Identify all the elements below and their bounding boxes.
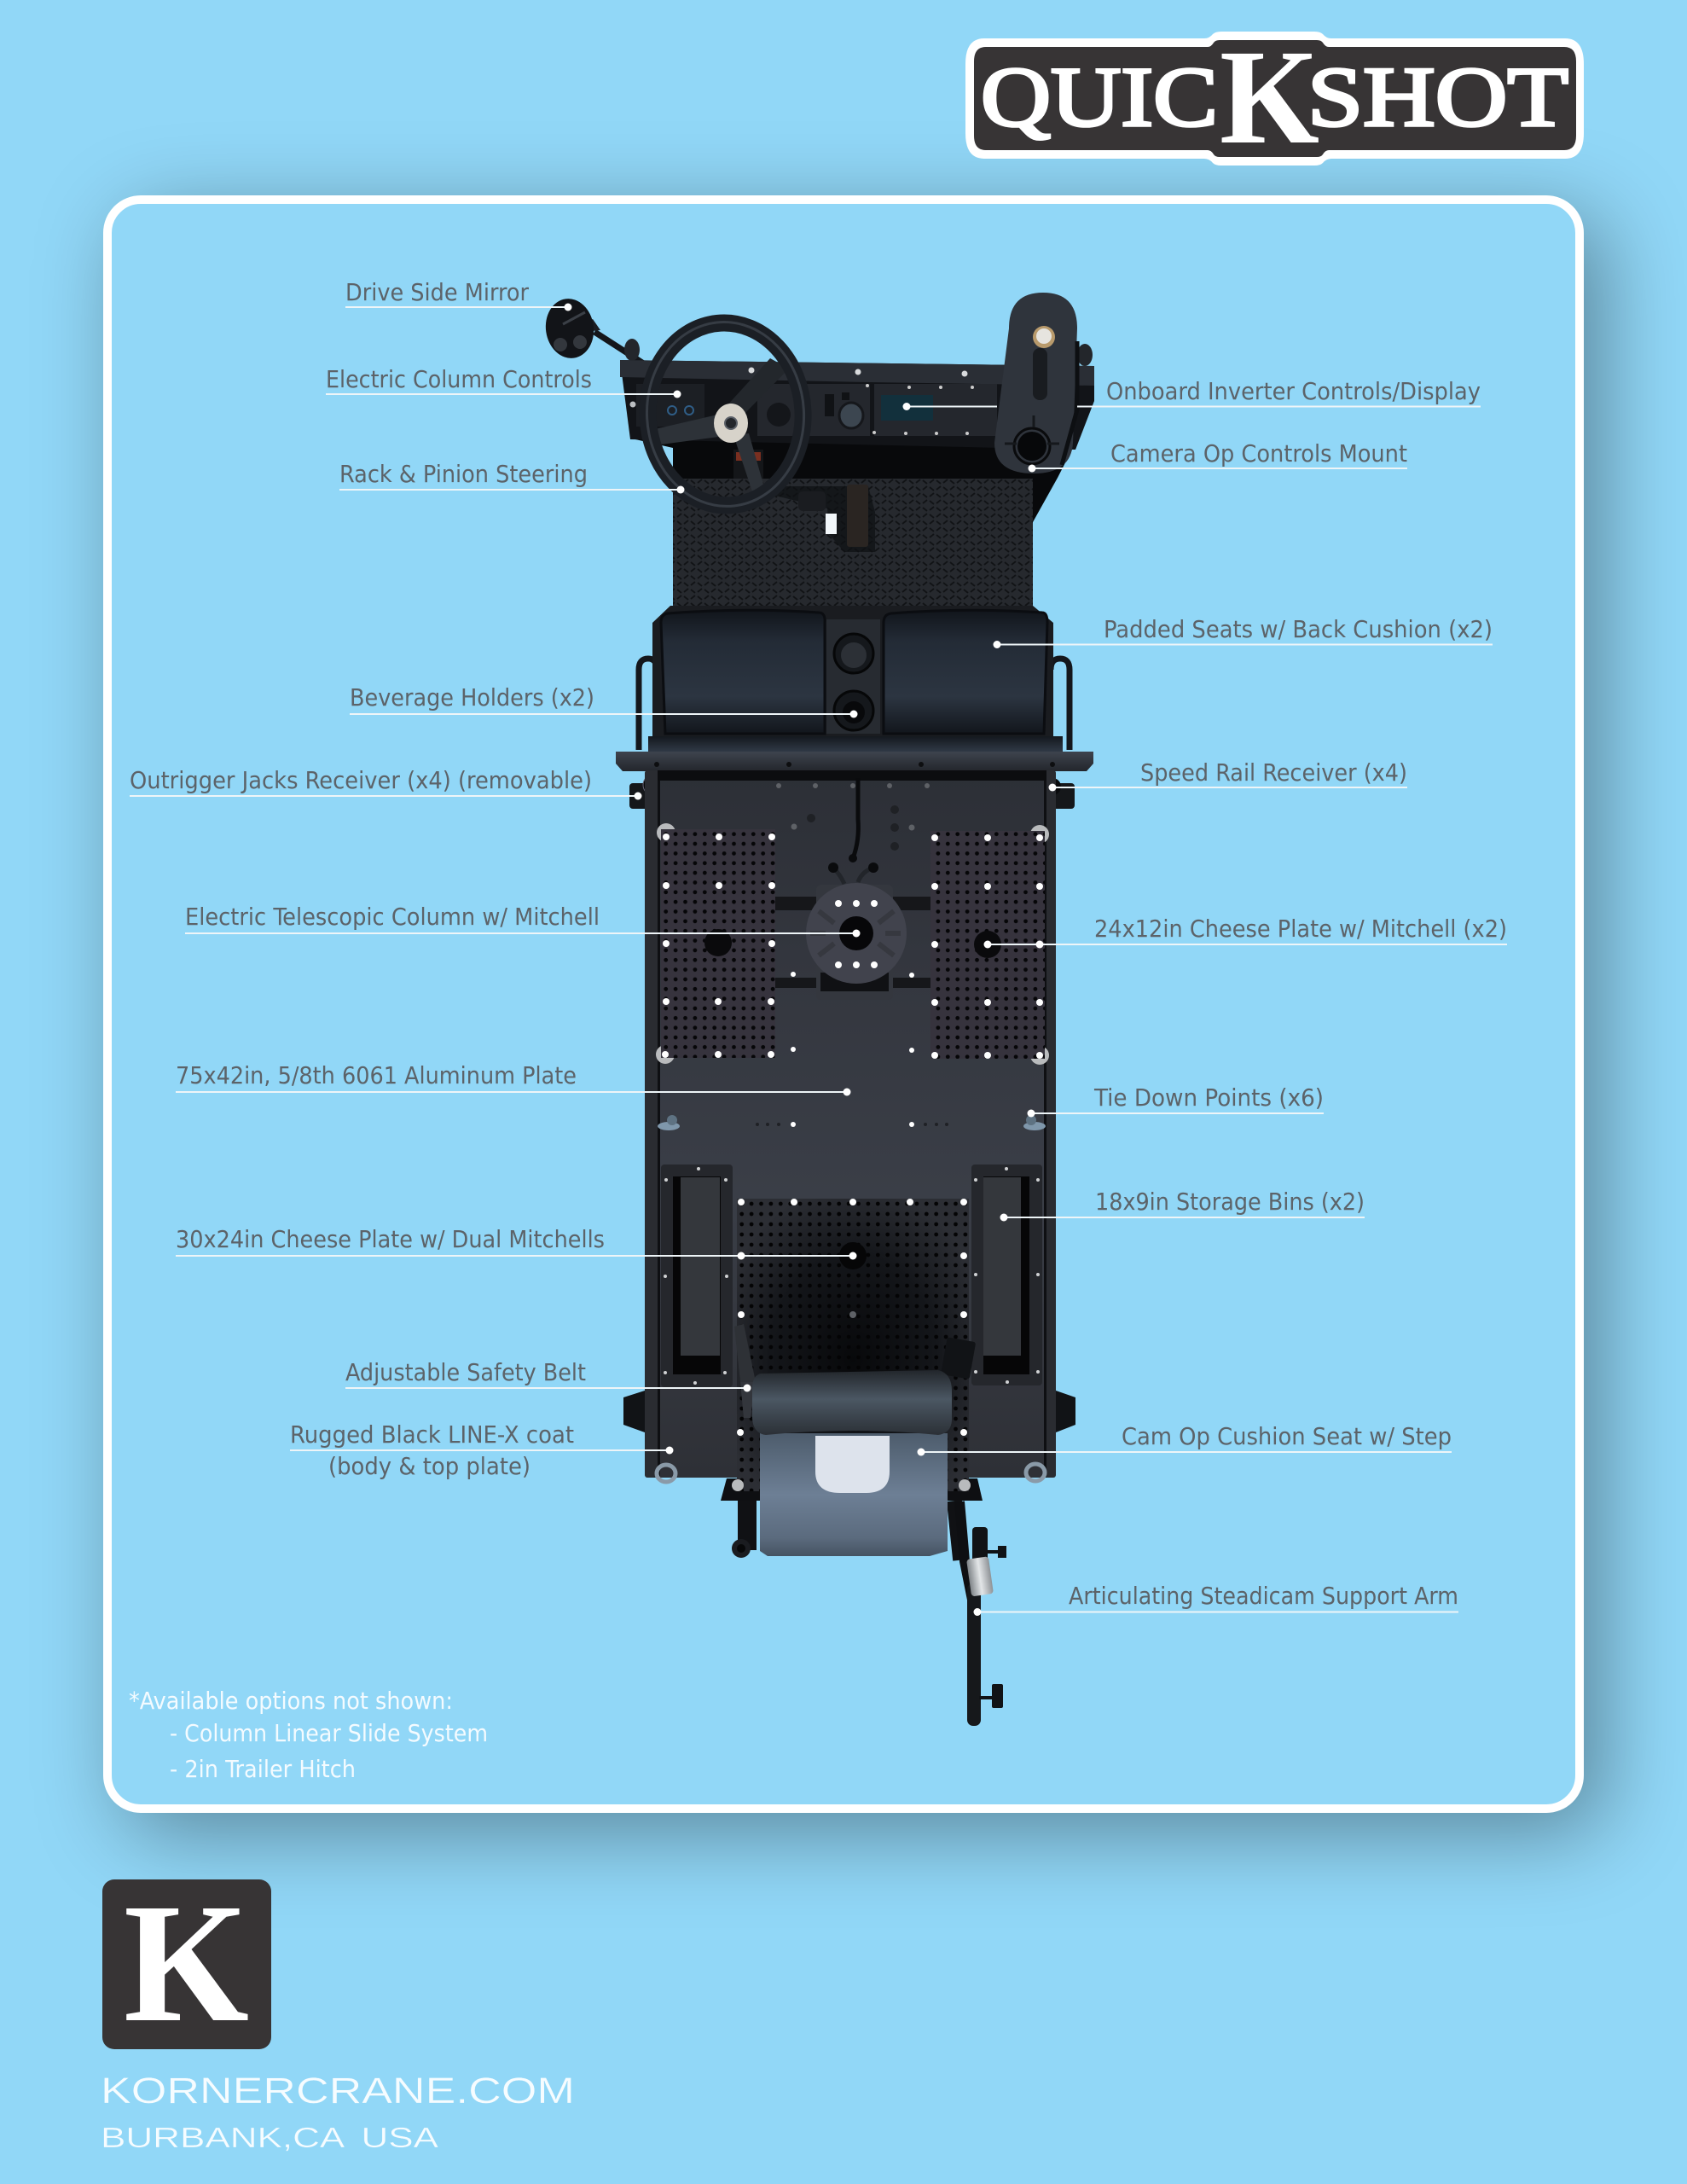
seat frame bbox=[639, 606, 1070, 750]
storage bin right bbox=[971, 1165, 1042, 1385]
plate white screws bbox=[791, 972, 914, 1127]
logo: QuickShot: SHOT bbox=[1307, 49, 1568, 144]
electric telescopic column bbox=[775, 854, 930, 1000]
label: Outrigger Jacks Receiver: Outrigger Jacks Receiver (x4) (removable) bbox=[130, 767, 592, 794]
label: Padded Seats: Padded Seats w/ Back Cushion (x2) bbox=[1104, 616, 1493, 643]
vehicle: QuickShot camera car top view bbox=[542, 293, 1094, 1726]
padded seats bbox=[661, 610, 1047, 734]
label: Storage Bins: 18x9in Storage Bins (x2) bbox=[1095, 1188, 1365, 1216]
label: Camera Op Controls Mount bbox=[1029, 440, 1407, 473]
footer: website: KORNERCRANE.COM bbox=[101, 2071, 575, 2111]
label: Drive Side Mirror: Drive Side Mirror bbox=[345, 279, 530, 306]
left cheese plate bbox=[656, 823, 775, 1064]
label: Aluminum Plate bbox=[176, 1062, 851, 1095]
label: Speed Rail Receiver bbox=[1049, 759, 1407, 792]
plate fixtures bbox=[776, 783, 930, 831]
label: Onboard Inverter bbox=[902, 378, 1481, 410]
label: Rack & Pinion Steering bbox=[339, 461, 684, 493]
label: Electric Telescopic Column: Electric Telescopic Column w/ Mitchell bbox=[185, 903, 600, 931]
note: available options: *Available options not shown: bbox=[129, 1687, 453, 1715]
cable run bbox=[853, 778, 858, 858]
footer: location: BURBANK,CA USA bbox=[101, 2122, 438, 2153]
label: 24x12in Cheese Plate bbox=[984, 915, 1507, 949]
label: Padded Seats bbox=[993, 616, 1493, 648]
dashboard bbox=[620, 360, 1094, 522]
label: Tie Down Points bbox=[1027, 1084, 1324, 1118]
floor: diamond plate and pedals bbox=[673, 479, 1033, 607]
label: Aluminum Plate: 75x42in, 5/8th 6061 Aluminum Plate bbox=[176, 1062, 577, 1089]
label: Steadicam Support Arm: Articulating Steadicam Support Arm bbox=[1069, 1583, 1458, 1610]
note: available options bbox=[129, 1687, 488, 1783]
label: Rugged Black LINE-X coat: Rugged Black LINE-X coat bbox=[290, 1421, 574, 1449]
icon: drive side mirror bbox=[542, 295, 645, 364]
center cheese plate bbox=[732, 1199, 971, 1491]
label: Rugged Black LINE-X coat bbox=[290, 1421, 674, 1480]
label: Electric Column Controls: Electric Column Controls bbox=[326, 366, 592, 393]
panel: main card bbox=[103, 195, 1584, 1813]
label: Adjustable Safety Belt: Adjustable Safety Belt bbox=[345, 1359, 586, 1386]
label: Onboard Inverter: Onboard Inverter Controls/Display bbox=[1106, 378, 1481, 405]
storage bin left bbox=[661, 1165, 733, 1387]
cam op cushion seat bbox=[752, 1370, 952, 1556]
label: Electric Telescopic Column bbox=[185, 903, 860, 937]
note: available options: - Column Linear Slide System bbox=[170, 1720, 488, 1747]
logo: QuickShot: QUIC bbox=[981, 49, 1218, 144]
bench edge and top bar bbox=[616, 736, 1093, 771]
rear bar and posts bbox=[721, 1478, 983, 1561]
tie down points bbox=[657, 1115, 1046, 1482]
label: Speed Rail Receiver: Speed Rail Receiver (x4) bbox=[1140, 759, 1407, 787]
label: Cam Op Cushion Seat bbox=[918, 1423, 1452, 1455]
label: 30x24in Cheese Plate: 30x24in Cheese Plate w/ Dual Mitchells bbox=[176, 1226, 605, 1253]
label: Camera Op Controls Mount: Camera Op Controls Mount bbox=[1110, 440, 1407, 468]
label: 24x12in Cheese Plate: 24x12in Cheese Plate w/ Mitchell (x2) bbox=[1094, 915, 1507, 943]
label: Storage Bins bbox=[1000, 1188, 1365, 1222]
steering wheel bbox=[642, 318, 809, 510]
articulating steadicam support arm bbox=[959, 1502, 1006, 1726]
label: 30x24in Cheese Plate bbox=[176, 1226, 856, 1259]
top plate body bbox=[645, 770, 1056, 1478]
label: Tie Down Points: Tie Down Points (x6) bbox=[1093, 1084, 1324, 1112]
label: Drive Side Mirror bbox=[345, 279, 571, 311]
label: Cam Op Cushion Seat: Cam Op Cushion Seat w/ Step bbox=[1122, 1423, 1452, 1450]
side outrigger receivers bbox=[623, 775, 1075, 1432]
label: Beverage Holders: Beverage Holders (x2) bbox=[350, 684, 594, 712]
safety belts bbox=[734, 1324, 976, 1418]
label: Steadicam Support Arm bbox=[974, 1583, 1458, 1616]
label: Adjustable Safety Belt bbox=[345, 1359, 751, 1392]
label: Electric Column Controls bbox=[326, 366, 681, 398]
label: Rugged Black LINE-X coat: (body & top plate) bbox=[328, 1453, 530, 1480]
label: Beverage Holders bbox=[350, 684, 858, 718]
logo: K badge: K bbox=[124, 1869, 249, 2058]
note: available options: - 2in Trailer Hitch bbox=[170, 1756, 356, 1783]
camera op controls mount bbox=[994, 293, 1093, 473]
logo: QuickShot bbox=[965, 22, 1584, 172]
logo: QuickShot: K bbox=[1220, 22, 1319, 172]
label: Rack & Pinion Steering: Rack & Pinion Steering bbox=[339, 461, 588, 488]
beverage holders bbox=[826, 619, 880, 734]
right cheese plate bbox=[930, 825, 1049, 1065]
